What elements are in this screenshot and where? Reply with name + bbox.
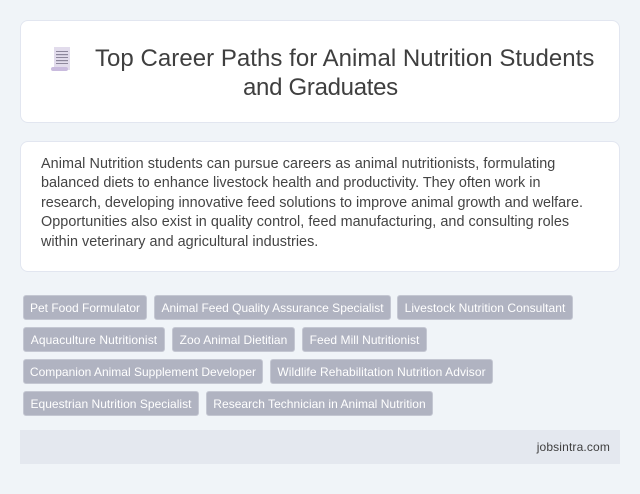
tag: Aquaculture Nutritionist	[31, 333, 157, 347]
header panel	[20, 20, 620, 123]
tag: Livestock Nutrition Consultant	[405, 301, 565, 315]
tag	[397, 295, 573, 320]
description text: within veterinary and agricultural industries.	[41, 234, 318, 250]
footer bar	[20, 430, 620, 464]
tag	[23, 295, 147, 320]
tag: Wildlife Rehabilitation Nutrition Advisor	[277, 365, 486, 379]
tag: Feed Mill Nutritionist	[310, 333, 419, 347]
title	[95, 45, 594, 101]
tag	[172, 327, 295, 352]
description text: Opportunities also exist in quality control, feed manufacturing, and consulting roles	[41, 214, 569, 230]
career tags	[23, 295, 573, 416]
tag: Companion Animal Supplement Developer	[30, 365, 256, 379]
tag	[23, 359, 263, 384]
tag	[302, 327, 427, 352]
description panel	[20, 141, 620, 272]
footer source text: jobsintra.com	[537, 440, 610, 454]
title: and Graduates	[243, 74, 398, 101]
tag: Zoo Animal Dietitian	[180, 333, 287, 347]
tag	[154, 295, 391, 320]
tag: Research Technician in Animal Nutrition	[213, 397, 426, 411]
description text: Animal Nutrition students can pursue careers as animal nutritionists, formulating	[41, 156, 555, 172]
description text: balanced diets to enhance livestock health and productivity. They often work in	[41, 175, 540, 191]
description text	[41, 156, 583, 250]
tag	[23, 327, 165, 352]
title: Top Career Paths for Animal Nutrition Students	[95, 45, 594, 72]
tag	[270, 359, 493, 384]
tag	[23, 391, 199, 416]
tag: Pet Food Formulator	[30, 301, 140, 315]
tag: Equestrian Nutrition Specialist	[30, 397, 192, 411]
tag	[206, 391, 433, 416]
tag: Animal Feed Quality Assurance Specialist	[161, 301, 384, 315]
icon: document scroll	[51, 47, 70, 71]
description text: research, developing innovative feed solutions to improve animal growth and welfare.	[41, 195, 583, 211]
